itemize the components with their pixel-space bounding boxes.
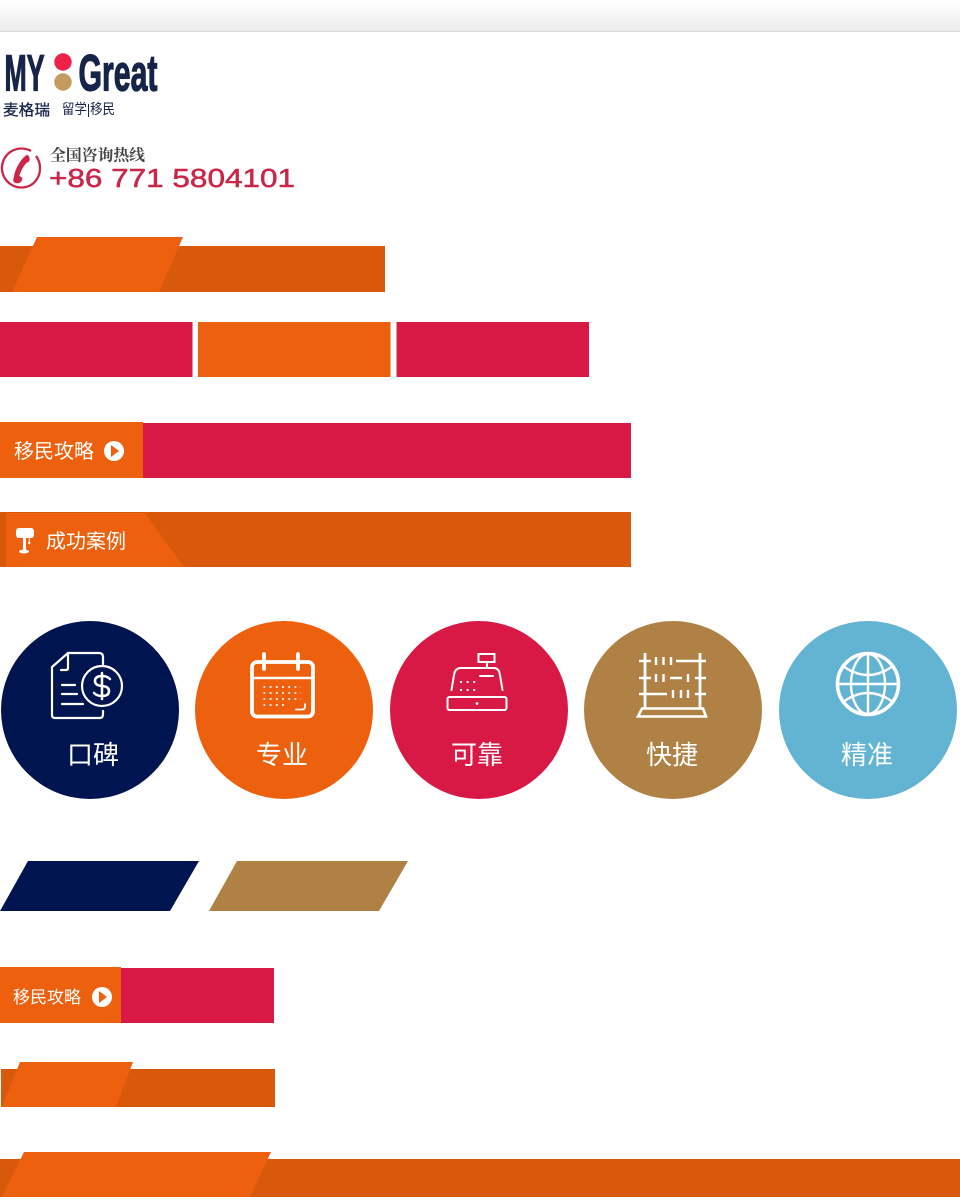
circle: reputation xyxy=(1,621,179,799)
circle: precise xyxy=(779,621,957,799)
banner: success cases xyxy=(0,512,631,567)
logo: 留学|移民 xyxy=(62,101,115,117)
banner: immigration guide: 移民攻略 xyxy=(14,440,94,463)
banner: small slanted tab bar xyxy=(1,1062,275,1107)
parallelogram: navy xyxy=(0,861,199,911)
icon: lamp xyxy=(16,528,34,554)
logo: MY xyxy=(4,44,45,102)
logo: Great xyxy=(78,44,158,102)
icon: play button small xyxy=(92,987,112,1007)
circle: reliable xyxy=(390,621,568,799)
icon: cash register xyxy=(448,654,506,710)
tabs: three colored blocks xyxy=(0,322,589,377)
icon: invoice with dollar xyxy=(52,653,122,718)
banner: immigration guide small xyxy=(0,967,274,1023)
icon: phone xyxy=(2,148,40,187)
icon: globe xyxy=(838,654,898,714)
banner: immigration guide small: 移民攻略 xyxy=(13,988,81,1007)
text: hotline label: 全国咨询热线 xyxy=(50,146,145,164)
banner: immigration guide xyxy=(0,422,631,478)
banner: slanted tab bar xyxy=(0,237,385,292)
banner: success cases: 成功案例 xyxy=(46,530,126,553)
circle: precise: 精准 xyxy=(841,740,893,770)
logo: 麦格瑞 xyxy=(3,102,50,119)
circle: fast xyxy=(584,621,762,799)
logo xyxy=(3,44,158,119)
icon: play button xyxy=(104,441,124,461)
circle: fast: 快捷 xyxy=(646,740,698,770)
text: phone number: +86 771 5804101 xyxy=(49,163,295,193)
circle: professional xyxy=(195,621,373,799)
banner: full-width slanted tab bar xyxy=(0,1152,960,1197)
circle: professional: 专业 xyxy=(256,740,308,770)
top header strip xyxy=(0,0,960,32)
parallelogram: tan xyxy=(209,861,408,911)
icon: abacus xyxy=(638,653,706,716)
circle: reliable: 可靠 xyxy=(451,740,503,770)
phone hotline xyxy=(2,146,295,193)
circle: reputation: 口碑 xyxy=(67,740,119,770)
icon: calendar xyxy=(252,654,313,716)
